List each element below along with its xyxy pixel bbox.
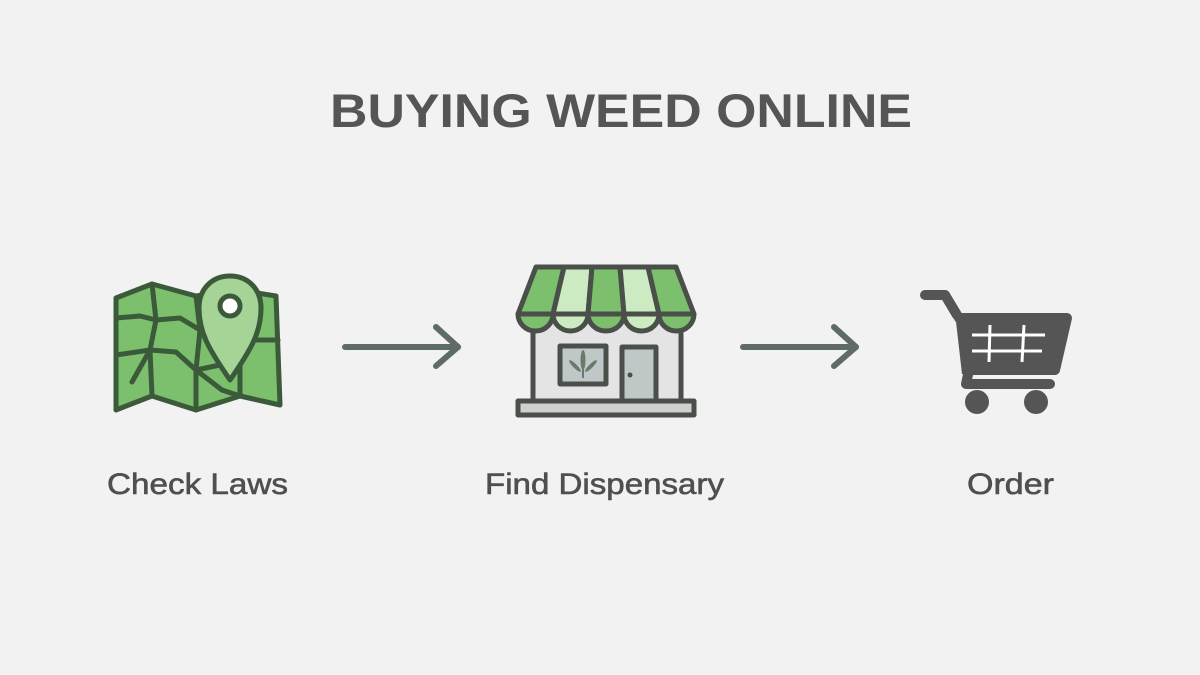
icon: map with pin [116, 276, 280, 410]
arrow 2 [743, 327, 856, 366]
icon: shopping cart [925, 295, 1068, 414]
label: Find Dispensary: Find Dispensary [485, 468, 724, 501]
label: Order: Order [967, 468, 1054, 501]
cannabis leaf [568, 350, 598, 378]
label: Check Laws: Check Laws [107, 468, 288, 501]
icon: storefront [518, 267, 694, 415]
arrow 1 [345, 327, 458, 366]
title: BUYING WEED ONLINE [330, 84, 912, 137]
